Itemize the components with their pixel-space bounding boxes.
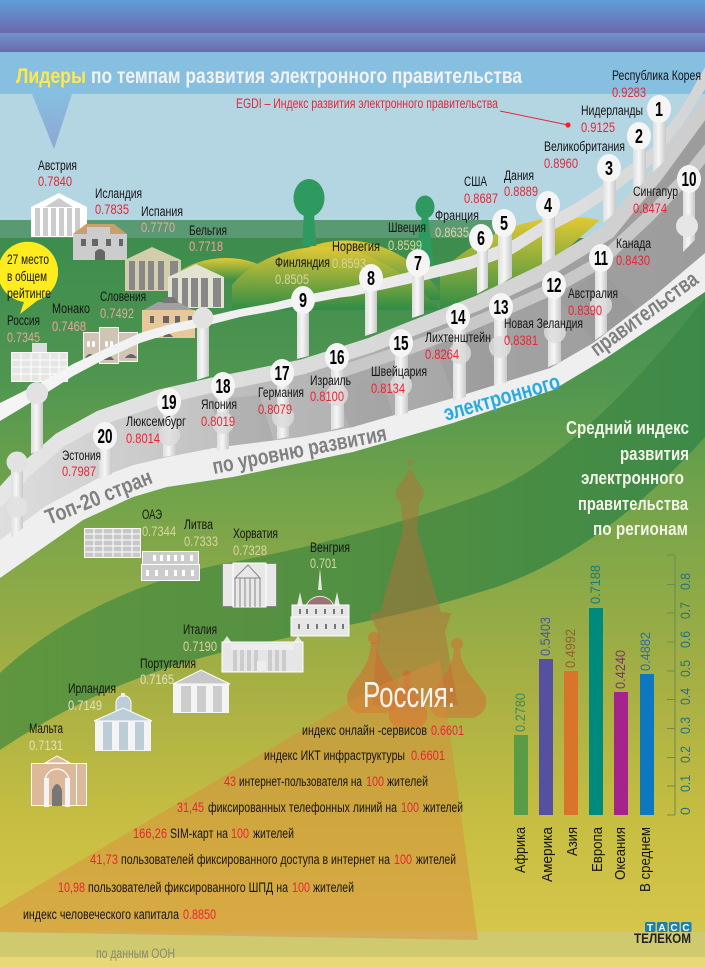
- rank 7: [406, 249, 430, 318]
- rank 16: 16: [330, 347, 344, 369]
- Germany: 0.8079: [258, 402, 292, 417]
- Belgium: [189, 223, 227, 254]
- rank 4: 4: [544, 195, 553, 217]
- Croatia: [233, 526, 278, 558]
- Finland: 0.8505: [275, 272, 309, 287]
- building: Iceland: [73, 224, 127, 260]
- rank 11: [589, 244, 613, 340]
- rank 6: [469, 224, 493, 294]
- Monaco: [52, 301, 90, 334]
- chart axis: 0.1: [677, 775, 693, 792]
- Lithuania: [184, 517, 218, 549]
- sky background: [0, 0, 705, 240]
- stat: fixed phone lines: 100: [401, 800, 419, 815]
- United Kingdom: Великобритания: [544, 139, 625, 154]
- Denmark: 0.8889: [504, 184, 538, 199]
- bar: Oceania: 0.4240: [612, 650, 628, 689]
- stat: internet users: 100: [366, 774, 384, 789]
- Iceland: Исландия: [95, 186, 142, 201]
- Japan: [201, 397, 237, 429]
- Portugal: 0.7165: [140, 672, 174, 687]
- Finland: [275, 255, 330, 287]
- Singapore: Сингапур: [633, 184, 678, 199]
- stat: fixed broadband: 100: [292, 880, 310, 895]
- Monaco: 0.7468: [52, 319, 86, 334]
- Australia: Австралия: [568, 286, 618, 301]
- chart axis: 0.3: [677, 717, 693, 734]
- Netherlands: 0.9125: [581, 120, 615, 135]
- stat: fixed phone lines: фиксированных телефонных линий на: [208, 800, 397, 815]
- stat: internet users: 43: [224, 774, 236, 789]
- Lithuania: Литва: [184, 517, 213, 532]
- rank 10: 10: [682, 169, 696, 191]
- building: Croatia: [222, 563, 276, 607]
- bottom bands: [0, 932, 705, 967]
- UAE: ОАЭ: [142, 507, 162, 522]
- chart axis: 0: [677, 807, 693, 815]
- Australia: 0.8390: [568, 303, 602, 318]
- rank 8: 8: [367, 268, 375, 290]
- UAE: 0.7344: [142, 524, 176, 539]
- front handrail: [340, 145, 705, 372]
- rank 14: [446, 303, 471, 401]
- Iceland: 0.7835: [95, 202, 129, 217]
- road edge strip with slogan: [0, 253, 705, 578]
- France: [435, 208, 479, 240]
- Sweden: 0.8599: [388, 238, 422, 253]
- Belgium: 0.7718: [189, 239, 223, 254]
- bar: Oceania: Океания: [612, 827, 629, 880]
- rank 18: 18: [216, 376, 230, 398]
- rank 15: [389, 329, 413, 416]
- hills: [170, 217, 600, 310]
- stat: ICT infrastructure: индекс ИКТ инфраструктуры: [264, 748, 405, 763]
- rank 12: [542, 271, 566, 367]
- Slovenia: [100, 289, 146, 321]
- EGDI note with pointer: EGDI – Индекс развития электронного правительства: [236, 96, 498, 111]
- icon: small tree: [414, 196, 434, 265]
- Malta: Мальта: [29, 721, 63, 736]
- bar: Asia: Азия: [564, 827, 581, 856]
- Canada: Канада: [616, 236, 651, 251]
- Liechtenstein: Лихтенштейн: [425, 330, 491, 345]
- Spain: Испания: [141, 204, 183, 219]
- Spain: 0.7770: [141, 220, 175, 235]
- USA: 0.8687: [464, 191, 498, 206]
- ground background: [0, 220, 705, 938]
- logo: TASS Telecom: А: [658, 923, 666, 934]
- Luxembourg: Люксембург: [126, 414, 186, 429]
- logo: TASS Telecom: [634, 922, 692, 946]
- stat: fixed internet: жителей: [416, 852, 456, 867]
- Japan: 0.8019: [201, 414, 235, 429]
- building: Monaco: [84, 328, 138, 364]
- stat: fixed phone lines: жителей: [423, 800, 463, 815]
- terrace shading wedges: [210, 270, 640, 448]
- Monaco: Монако: [52, 301, 90, 316]
- grey terrace surface: [0, 100, 705, 545]
- Italy: [183, 622, 217, 654]
- Singapore: 0.8474: [633, 201, 667, 216]
- New Zealand: 0.8381: [504, 333, 538, 348]
- building: Portugal: [173, 670, 230, 713]
- Israel: 0.8100: [310, 389, 344, 404]
- Russia: 0.7345: [7, 330, 40, 345]
- Belgium: Бельгия: [189, 223, 227, 238]
- logo: TASS Telecom: Т: [647, 923, 653, 934]
- Austria: Австрия: [38, 158, 77, 173]
- country labels: other countries: [7, 158, 350, 753]
- rank 19: 19: [162, 392, 176, 414]
- left knob posts: [6, 308, 214, 538]
- lower handrail: [0, 98, 705, 502]
- bar: Africa: 0.2780: [512, 693, 528, 732]
- Russia statistics list: [23, 723, 464, 922]
- Denmark: [504, 168, 538, 199]
- Norway: Норвегия: [332, 239, 380, 254]
- Denmark: Дания: [504, 168, 534, 183]
- USA: [464, 174, 498, 206]
- rank 4: [536, 191, 560, 264]
- bar: Europe: [587, 565, 606, 872]
- rank 6: 6: [477, 228, 485, 250]
- United Kingdom: 0.8960: [544, 156, 578, 171]
- New Zealand: [504, 316, 583, 348]
- Switzerland: Швейцария: [371, 364, 427, 379]
- title: по темпам развития электронного правительства: [91, 65, 522, 88]
- Switzerland: [371, 364, 427, 396]
- heading: average index by region: развития: [620, 444, 689, 464]
- bar chart: regional averages: [512, 555, 693, 892]
- stat: internet users: интернет-пользователя на: [239, 774, 362, 789]
- stat: SIM cards: 166,26: [133, 826, 167, 841]
- Japan: Япония: [201, 397, 237, 412]
- chart axis: 0.6: [677, 631, 693, 648]
- building: Belgium: [168, 264, 224, 308]
- rank 9: 9: [299, 290, 307, 312]
- Slovenia: Словения: [100, 289, 146, 304]
- logo: TASS Telecom: С: [670, 923, 678, 934]
- title band pointer triangle: [32, 94, 72, 149]
- Slovenia: 0.7492: [100, 306, 134, 321]
- Germany: Германия: [258, 385, 304, 400]
- chart axis: 0.5: [677, 660, 693, 677]
- United Kingdom: [544, 139, 625, 171]
- Italy: 0.7190: [183, 639, 217, 654]
- Ireland: [68, 681, 116, 713]
- rank 20: [93, 422, 117, 479]
- bar: average: [637, 632, 654, 892]
- EGDI note with pointer: [236, 96, 571, 128]
- Ireland: Ирландия: [68, 681, 116, 696]
- stat: online services: 0.6601: [431, 723, 464, 738]
- Croatia: 0.7328: [233, 543, 267, 558]
- columns with rank markers: [6, 95, 701, 538]
- Germany: [258, 385, 304, 417]
- stat: SIM cards: SIM-карт на: [170, 826, 228, 841]
- Netherlands: [581, 103, 643, 135]
- bar: Africa: Африка: [512, 826, 529, 873]
- rank 17: [270, 359, 294, 439]
- stat: SIM cards: [133, 826, 294, 841]
- Israel: Израиль: [310, 373, 351, 388]
- stat: fixed phone lines: 31,45: [177, 800, 204, 815]
- France: Франция: [435, 208, 479, 223]
- Estonia: [62, 448, 101, 479]
- buildings of the upper left: [11, 193, 224, 382]
- rank 3: 3: [605, 158, 613, 180]
- Lithuania: 0.7333: [184, 534, 218, 549]
- Croatia: Хорватия: [233, 526, 278, 541]
- callout: 27th place: [0, 242, 58, 314]
- chart axis: [667, 555, 693, 815]
- icon: large tree: [294, 179, 324, 246]
- rank 7: 7: [414, 253, 422, 275]
- rank 13: 13: [494, 297, 508, 319]
- Russia light wedge: [0, 660, 478, 940]
- USA: США: [464, 174, 487, 189]
- rank 10: [676, 165, 701, 252]
- Malta: [29, 721, 63, 753]
- heading: average index by region: [566, 418, 689, 539]
- rank 3: [597, 154, 621, 223]
- callout: 27th place: 27 место: [7, 252, 49, 267]
- slogan: electronic: электронного: [440, 369, 563, 426]
- Malta: 0.7131: [29, 738, 63, 753]
- callout: 27th place: в общем: [7, 269, 47, 284]
- chart axis: 0.8: [677, 573, 693, 590]
- stat: human capital: индекс человеческого капитала: [23, 907, 179, 922]
- Israel: [310, 373, 351, 404]
- Ireland: 0.7149: [68, 698, 102, 713]
- bar: Americas: 0.5403: [537, 617, 553, 656]
- Luxembourg: 0.8014: [126, 431, 160, 446]
- rank 19: [157, 388, 181, 457]
- chart axis: 0.2: [677, 746, 693, 763]
- rank 5: [492, 209, 516, 286]
- Estonia: Эстония: [62, 448, 101, 463]
- rank 12: 12: [546, 275, 562, 297]
- Austria: [38, 158, 77, 189]
- Netherlands: Нидерланды: [581, 103, 643, 118]
- source note: по данным ООН: [96, 946, 175, 961]
- stat: fixed broadband: жителей: [313, 880, 354, 895]
- bar: Americas: [537, 617, 556, 882]
- Republic of Korea: [612, 68, 701, 100]
- bar: Europe: 0.7188: [587, 565, 603, 604]
- chart axis: 0.4: [677, 688, 693, 705]
- logo: TASS Telecom: ТЕЛЕКОМ: [634, 930, 691, 946]
- heading: average index by region: по регионам: [593, 519, 688, 539]
- Norway: [332, 239, 380, 271]
- building: UAE: [84, 528, 141, 558]
- rank 8: [359, 264, 383, 336]
- rank 14: 14: [450, 307, 466, 329]
- Spain: [141, 204, 183, 235]
- rank 17: 17: [274, 363, 290, 385]
- callout: 27th place: рейтинге: [7, 286, 51, 301]
- stat: human capital: 0.8850: [183, 907, 216, 922]
- bar: Africa: [512, 693, 529, 873]
- stat: fixed internet: 100: [394, 852, 412, 867]
- building: Slovenia: [142, 297, 195, 338]
- stat: internet users: жителей: [387, 774, 428, 789]
- stat: ICT infrastructure: 0.6601: [411, 748, 445, 763]
- Liechtenstein: [425, 330, 491, 362]
- rank 13: [489, 293, 513, 386]
- bar: Asia: [562, 629, 581, 856]
- rank 2: 2: [635, 126, 643, 148]
- Luxembourg: [126, 414, 186, 446]
- heading: average index by region: электронного: [581, 468, 684, 488]
- stat: SIM cards: 100: [231, 826, 249, 841]
- Italy: Италия: [183, 622, 217, 637]
- Portugal: [140, 656, 196, 687]
- stat: fixed internet: 41,73: [90, 852, 118, 867]
- rank 1: 1: [655, 99, 663, 121]
- bar: average: 0.4882: [637, 632, 653, 671]
- Switzerland: 0.8134: [371, 381, 405, 396]
- Liechtenstein: 0.8264: [425, 347, 459, 362]
- Republic of Korea: 0.9283: [612, 85, 646, 100]
- stat: fixed broadband: пользователей фиксированного ШПД на: [88, 880, 288, 895]
- dark green swoosh: [0, 298, 705, 750]
- rank 9: [291, 286, 315, 359]
- Portugal: Португалия: [140, 656, 196, 671]
- country labels: top 20: [62, 68, 701, 479]
- stat: fixed internet: пользователей фиксированного доступа в интернет на: [121, 852, 390, 867]
- Sweden: Швеция: [388, 220, 426, 235]
- building: Lithuania: [142, 552, 200, 580]
- building: Russia: [11, 343, 68, 382]
- Russia: Россия: [7, 313, 40, 328]
- Iceland: [95, 186, 142, 217]
- building: Hungary: [291, 568, 349, 636]
- Canada: [616, 236, 651, 268]
- rank 18: [211, 372, 235, 451]
- slogan: by level of development: по уровню развития: [210, 421, 389, 479]
- upper handrail: [0, 67, 705, 421]
- Finland: Финляндия: [275, 255, 330, 270]
- bar: Europe: Европа: [589, 826, 606, 872]
- Austria: 0.7840: [38, 174, 72, 189]
- title: Лидеры: [16, 65, 86, 88]
- rank 15: 15: [394, 333, 408, 355]
- heading: Russia: Россия:: [363, 674, 455, 715]
- Australia: [568, 286, 618, 318]
- rank 2: [627, 122, 651, 192]
- Estonia: 0.7987: [62, 464, 96, 479]
- New Zealand: Новая Зеландия: [504, 316, 583, 331]
- building: Austria: [31, 193, 87, 237]
- Singapore: [633, 184, 678, 216]
- France: 0.8635: [435, 225, 469, 240]
- Hungary: [310, 540, 350, 571]
- building: Malta: [32, 756, 86, 807]
- Sweden: [388, 220, 426, 253]
- bar: Americas: Америка: [539, 826, 556, 882]
- rank 20: 20: [98, 426, 112, 448]
- stat: fixed broadband: 10,98: [58, 880, 85, 895]
- rank 5: 5: [500, 213, 508, 235]
- logo: TASS Telecom: С: [682, 923, 690, 934]
- UAE: [142, 507, 176, 539]
- building: Italy: [222, 636, 303, 672]
- stat: online services: индекс онлайн -сервисов: [302, 723, 427, 738]
- chart axis: 0.7: [677, 602, 693, 619]
- building: Ireland: [94, 693, 152, 751]
- Canada: 0.8430: [616, 253, 650, 268]
- bar: Asia: 0.4992: [562, 629, 578, 668]
- bar: Oceania: [612, 650, 629, 880]
- rank 11: 11: [594, 248, 608, 270]
- building: Spain: [125, 247, 181, 291]
- bar: average: В среднем: [637, 827, 654, 892]
- Hungary: Венгрия: [310, 540, 350, 555]
- stat: SIM cards: жителей: [253, 826, 294, 841]
- rank 1: [647, 95, 671, 172]
- slogan: top-20: Топ-20 стран: [42, 464, 156, 530]
- Norway: 0.8593: [332, 256, 366, 271]
- rank 16: [325, 343, 349, 430]
- Russia cathedral silhouette: [347, 460, 486, 728]
- Hungary: 0.701: [310, 556, 337, 571]
- Russia: [7, 313, 40, 345]
